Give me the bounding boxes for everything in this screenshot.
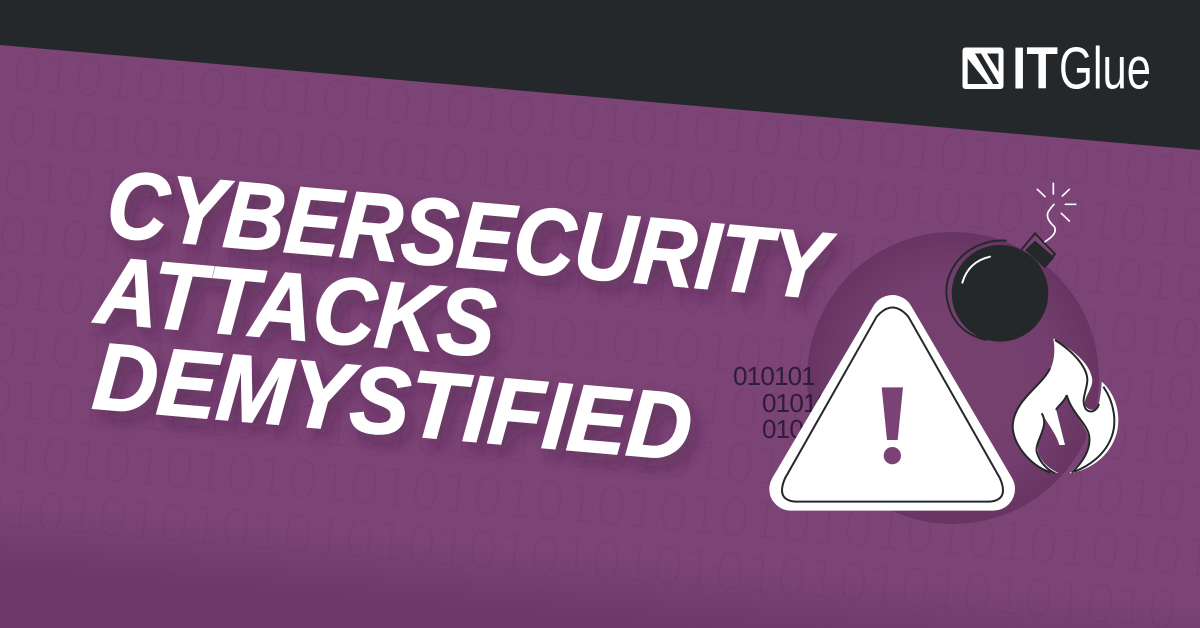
title [89,151,838,481]
illustration backdrop circle [807,232,1099,524]
binary digits beside triangle: 010101 [733,361,815,391]
title: ATTACKS [90,237,500,378]
title: CYBERSECURITY [103,151,838,320]
binary digits beside triangle: 01010 [762,388,831,418]
icon: flame [1013,338,1118,473]
logo wordmark: IT [1012,36,1058,102]
dark top band [0,0,1200,150]
icon: bomb [946,183,1076,342]
logo: IT Glue [962,36,1151,102]
icon: warning triangle [782,307,1003,502]
logo wordmark: Glue [1059,36,1151,102]
binary digits beside triangle [733,361,831,444]
binary digits beside triangle: 01010 [762,414,831,444]
title: DEMYSTIFIED [89,323,696,481]
logo mark [962,48,1004,89]
